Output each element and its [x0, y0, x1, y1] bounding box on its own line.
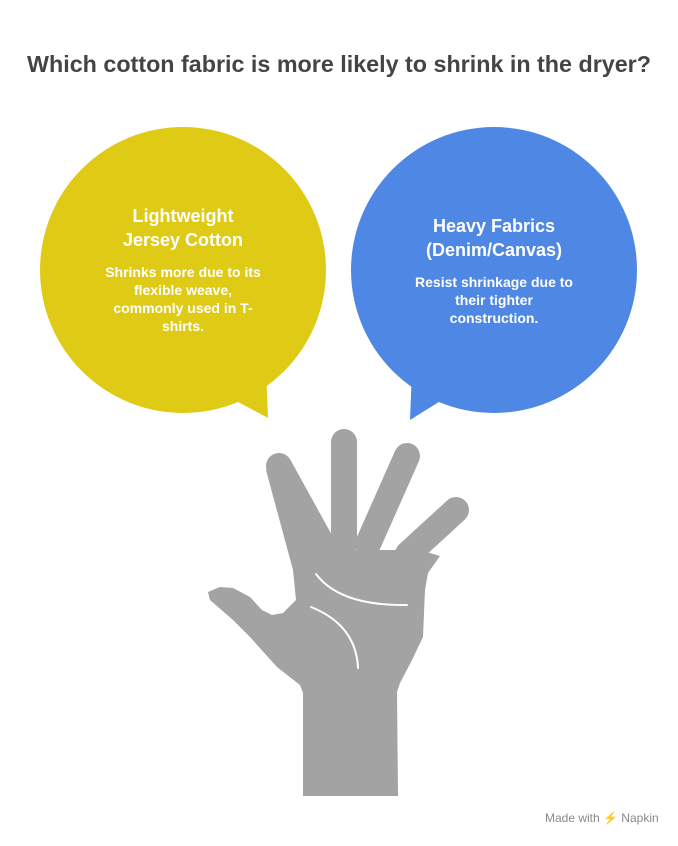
bubble: yellow — [40, 127, 326, 418]
icon: hand — [208, 442, 456, 796]
text: blue bubble: (Denim/Canvas) — [426, 240, 562, 260]
text: blue bubble: Resist shrinkage due to their tighter construction. — [415, 274, 573, 326]
text: yellow bubble: Shrinks more due to its flexible weave, commonly used in T-shirts. — [105, 264, 261, 334]
text: yellow bubble: Lightweight — [132, 206, 233, 226]
bubble: blue — [351, 127, 637, 420]
text: blue bubble: Heavy Fabrics — [433, 216, 555, 236]
text: yellow bubble: Jersey Cotton — [123, 230, 243, 250]
title: Which cotton fabric is more likely to shrink in the dryer? — [27, 51, 651, 77]
text: yellow bubble — [105, 206, 261, 334]
footer: Made with ⚡ Napkin — [545, 811, 659, 825]
text: blue bubble — [415, 216, 573, 326]
